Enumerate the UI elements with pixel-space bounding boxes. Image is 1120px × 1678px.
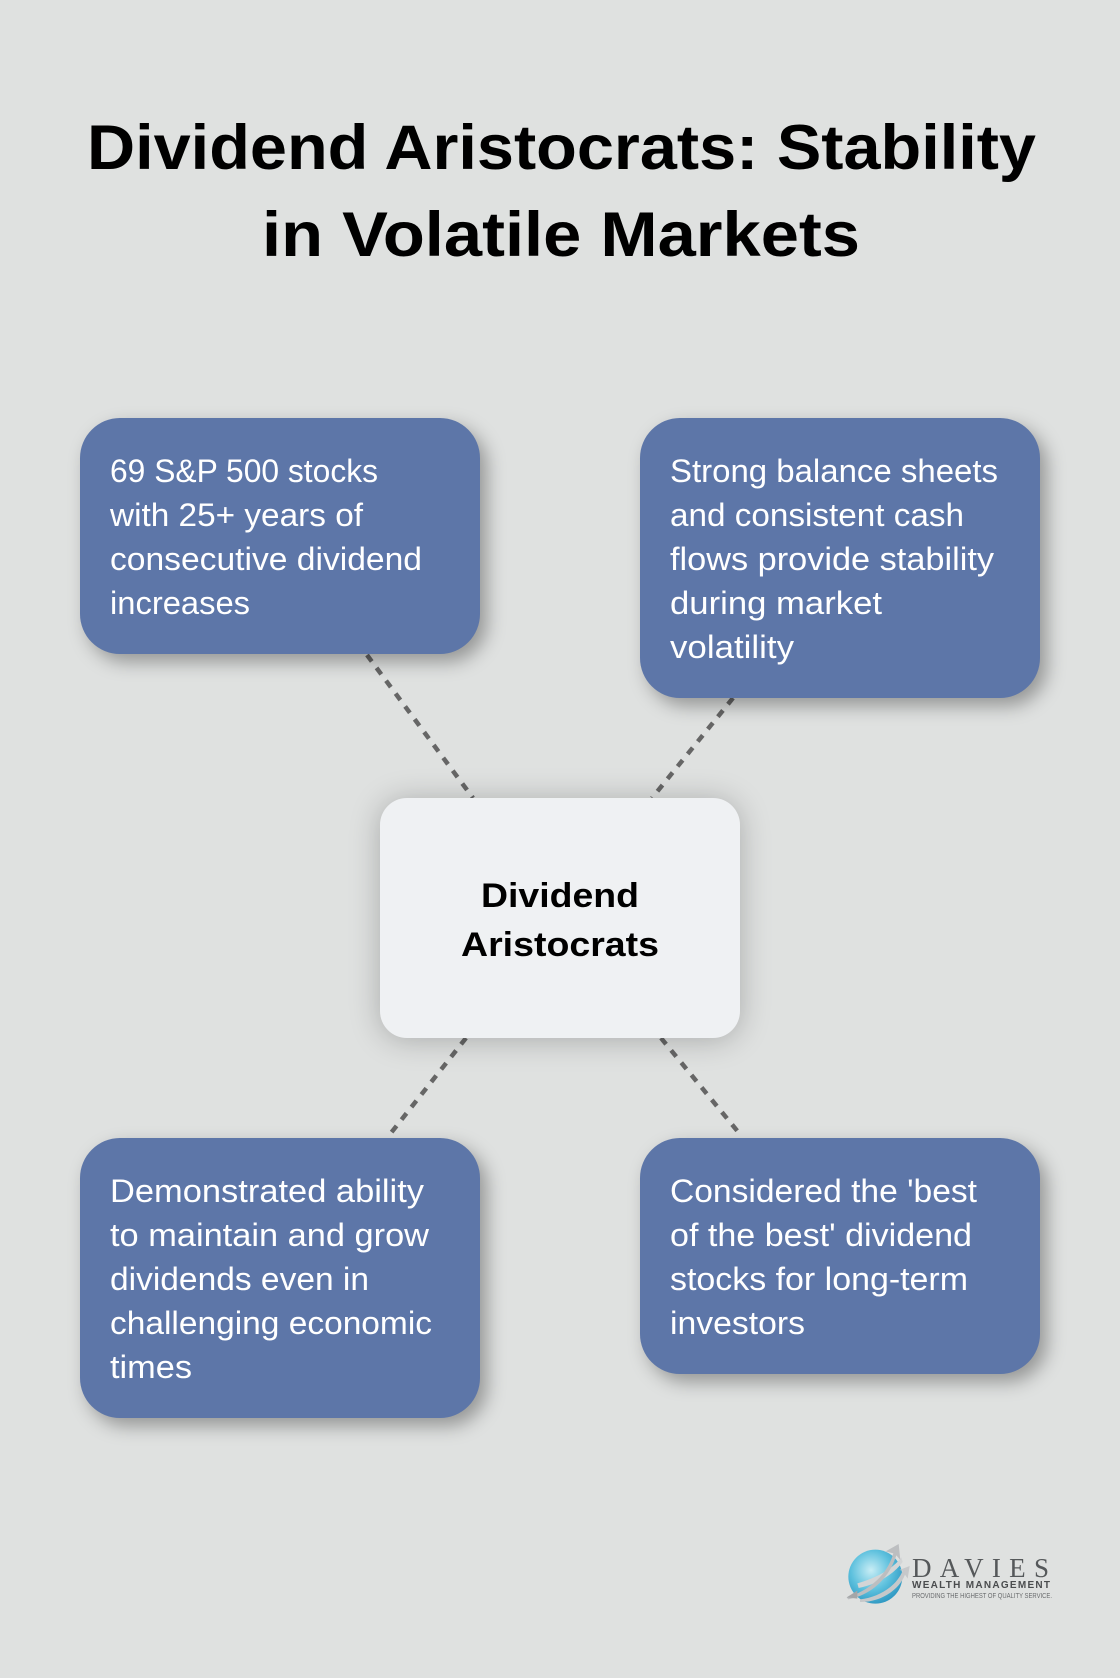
icon: globe with arrows	[847, 1544, 910, 1604]
panel: demonstrated ability	[80, 1138, 480, 1418]
panel: best of the best: of the best' dividend	[670, 1217, 972, 1253]
panel: strong balance sheets: Strong balance sheets	[670, 453, 998, 489]
title: Dividend Aristocrats: Stability	[87, 113, 1036, 183]
panel: strong balance sheets	[640, 418, 1040, 698]
logo: Davies Wealth Management: DAVIES	[912, 1553, 1049, 1583]
title	[87, 113, 1036, 270]
connector: bottom left card to hub	[387, 1038, 466, 1138]
logo: Davies Wealth Management	[847, 1544, 1052, 1604]
panel: S&P 500 stocks: increases	[110, 585, 250, 621]
panel: strong balance sheets: during market	[670, 585, 882, 621]
title: in Volatile Markets	[262, 200, 860, 270]
panel: demonstrated ability: dividends even in	[110, 1261, 369, 1297]
panel: best of the best	[640, 1138, 1040, 1374]
panel: strong balance sheets: volatility	[670, 629, 794, 665]
panel: strong balance sheets: flows provide stability	[670, 541, 994, 577]
panel: demonstrated ability: times	[110, 1349, 192, 1385]
panel: best of the best: investors	[670, 1305, 805, 1341]
connector: top right card to hub	[652, 698, 733, 798]
logo: Davies Wealth Management: PROVIDING THE HIGHEST OF QUALITY SERVICE.	[912, 1593, 1052, 1600]
panel: best of the best: Considered the 'best	[670, 1173, 977, 1209]
connector: top left card to hub	[367, 655, 473, 798]
panel: S&P 500 stocks	[80, 418, 480, 654]
panel: S&P 500 stocks: with 25+ years of	[109, 497, 363, 533]
panel: strong balance sheets: and consistent cash	[670, 497, 964, 533]
panel: demonstrated ability: Demonstrated ability	[110, 1173, 424, 1209]
panel: demonstrated ability: challenging economic	[110, 1305, 432, 1341]
panel: S&P 500 stocks: 69 S&P 500 stocks	[110, 453, 378, 489]
connector: bottom right card to hub	[661, 1038, 739, 1133]
logo: Davies Wealth Management: WEALTH MANAGEMENT	[912, 1580, 1050, 1591]
panel: hub Dividend Aristocrats	[380, 798, 740, 1038]
panel: S&P 500 stocks: consecutive dividend	[110, 541, 422, 577]
panel: hub Dividend Aristocrats: Aristocrats	[461, 926, 659, 964]
panel: hub Dividend Aristocrats: Dividend	[481, 877, 639, 915]
panel: best of the best: stocks for long-term	[670, 1261, 968, 1297]
panel: demonstrated ability: to maintain and grow	[110, 1217, 430, 1253]
